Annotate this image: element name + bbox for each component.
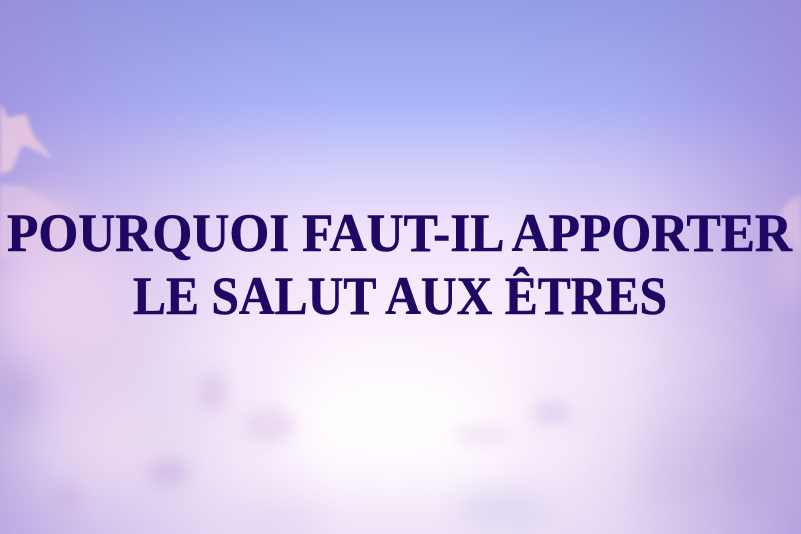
title xyxy=(7,203,793,326)
title: LE SALUT AUX ÊTRES xyxy=(133,266,667,326)
